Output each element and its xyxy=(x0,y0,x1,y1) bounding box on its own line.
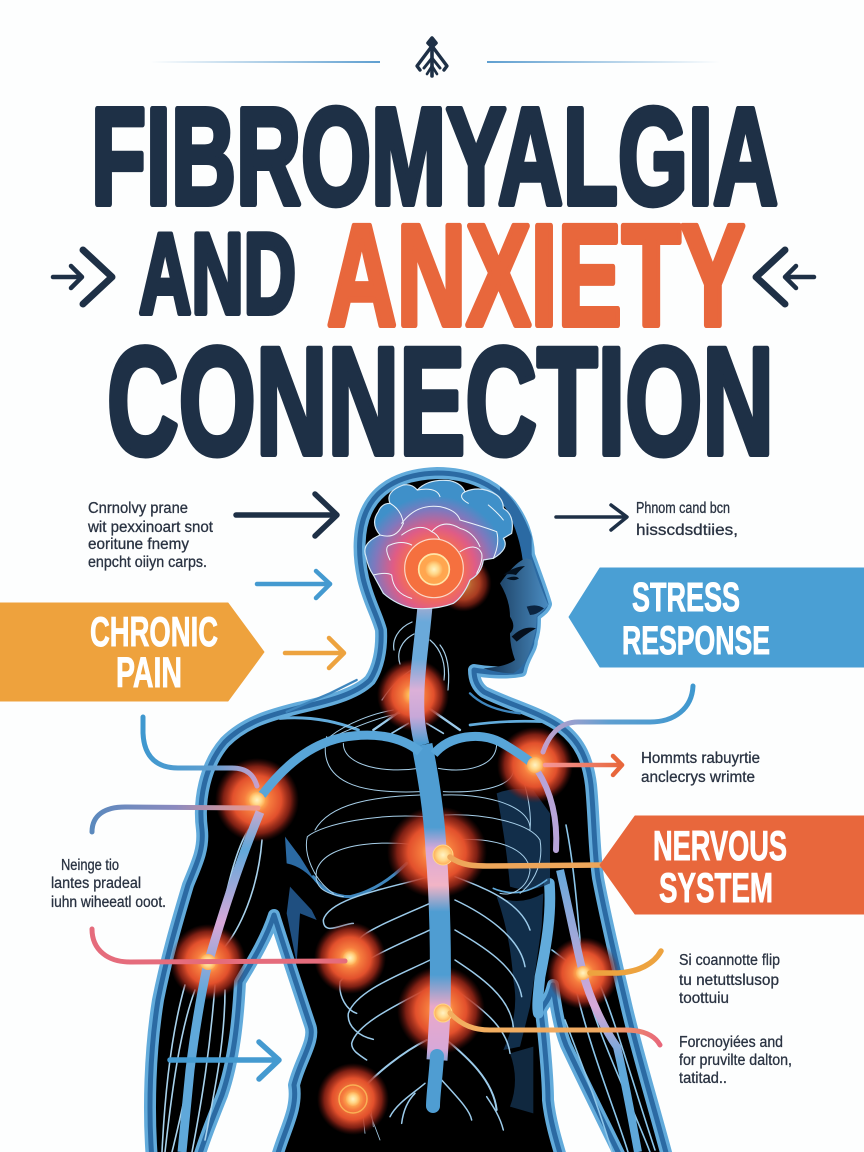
brain folds xyxy=(373,489,503,598)
glow: right shoulder xyxy=(497,727,573,803)
brain core center xyxy=(425,561,443,578)
divider left xyxy=(150,61,380,63)
text block: upper left: wit pexxinoart snot xyxy=(87,519,214,536)
text block: hormones xyxy=(641,750,760,786)
connector: blue right xyxy=(543,686,693,752)
banner text: PAIN: PAIN xyxy=(116,649,182,697)
silhouette inner edge xyxy=(150,473,668,1152)
top ornament xyxy=(150,38,720,76)
brain xyxy=(365,480,512,612)
torso edge on right xyxy=(538,883,550,1013)
glowing pain points xyxy=(170,659,619,1135)
text block: upper left: eoritune fnemy xyxy=(88,536,189,553)
right lower torso shading xyxy=(510,1047,533,1113)
left arm nerve xyxy=(182,812,260,1152)
node: abdomen xyxy=(434,1004,452,1022)
banner text: SYSTEM: SYSTEM xyxy=(659,864,773,911)
icon: left title arrows xyxy=(53,250,112,304)
left chest shapes xyxy=(285,837,317,883)
text block: upper left: Cnrnolvy prane xyxy=(88,500,188,517)
text block: upper left: enpcht oiiyn carps. xyxy=(88,554,207,571)
icon: right title arrows xyxy=(756,250,814,304)
node: left shoulder xyxy=(249,792,265,808)
text block: lower right one: Si coannotte flip xyxy=(679,952,780,969)
arrow: red to hormones text xyxy=(545,756,622,775)
text block: lower right one: toottuiu xyxy=(679,990,729,1007)
node: hip ring xyxy=(339,1085,367,1113)
text block: lower right one xyxy=(679,952,780,1007)
text block: lower right two xyxy=(679,1034,792,1087)
main nerves xyxy=(182,580,638,1152)
thin upper ribs xyxy=(306,710,541,897)
clavicles xyxy=(280,680,543,730)
body silhouette xyxy=(150,473,668,1152)
banner: nervous system xyxy=(600,816,864,914)
banner: chronic pain xyxy=(0,603,264,701)
text block: upper right: Phnom cand bcn xyxy=(636,500,730,517)
glow: chest xyxy=(387,806,487,898)
left lower chest shape xyxy=(287,887,317,963)
fishbone ribs xyxy=(323,707,530,1130)
glow: right elbow xyxy=(547,937,619,1009)
connector: orange right xyxy=(590,951,661,973)
text block: left middle xyxy=(51,857,166,911)
text block: lower right one: tu netuttslusop xyxy=(679,972,779,989)
right chest shading xyxy=(497,789,550,889)
glow: left rib xyxy=(314,922,386,994)
arrow: orange left xyxy=(285,638,344,668)
node: right shoulder xyxy=(527,757,543,773)
right arm nerve xyxy=(560,870,638,1152)
text block: hormones: Hommts rabuyrtie xyxy=(641,750,760,767)
text block: lower right two: tatitad.. xyxy=(679,1070,727,1087)
glowing node centers xyxy=(200,757,590,1106)
brain core inner ring xyxy=(419,554,449,585)
connector: lower right xyxy=(450,1013,660,1045)
chest band right xyxy=(493,880,547,893)
glow: abdomen xyxy=(397,966,485,1054)
text block: upper left xyxy=(87,500,214,571)
node: chest xyxy=(433,845,453,865)
node: hip xyxy=(346,1092,360,1106)
chest band left xyxy=(313,863,407,897)
connector: blue to pink left xyxy=(92,807,258,832)
glow: neck xyxy=(377,659,449,731)
text block: lower right two: Forcnoyiées and xyxy=(679,1034,783,1051)
node: left rib xyxy=(343,951,357,965)
brain core outer ring xyxy=(405,539,463,598)
arrow: dark left xyxy=(236,494,337,536)
left arm details xyxy=(162,830,262,1152)
banner text: RESPONSE: RESPONSE xyxy=(622,619,770,663)
banner text: STRESS: STRESS xyxy=(632,574,740,620)
text block: left middle: iuhn wiheeatl ooot. xyxy=(51,894,166,911)
brain shape xyxy=(365,480,512,609)
right abdomen shading xyxy=(497,893,543,1050)
connector: chest to nervous banner xyxy=(450,857,602,866)
arrow: dark right xyxy=(556,505,627,530)
left shoulder nerve xyxy=(262,735,420,795)
right arm details xyxy=(552,825,655,1152)
icon: nerve tree xyxy=(417,38,447,76)
neck rib lines xyxy=(382,622,449,700)
glow: hip xyxy=(317,1063,389,1135)
text block: left middle: lantes pradeal xyxy=(51,875,141,892)
glow: left elbow xyxy=(170,924,246,1000)
text block: hormones: anclecrys wrimte xyxy=(641,769,755,786)
title word: AND: AND xyxy=(139,211,296,338)
right upper arm lilac xyxy=(537,770,556,850)
connector: pink left xyxy=(92,929,345,962)
text block: upper right xyxy=(636,500,738,539)
glow: left shoulder xyxy=(215,758,299,842)
head rim and face xyxy=(483,487,548,673)
glow behind brain xyxy=(435,555,492,612)
banner: stress response xyxy=(569,568,864,667)
node: left elbow xyxy=(200,954,216,970)
torso detail group xyxy=(280,680,550,1140)
connector: blue top left xyxy=(143,717,257,786)
divider right xyxy=(487,61,720,63)
spinal cord trunk xyxy=(422,745,440,1060)
node: right elbow xyxy=(576,966,590,980)
spinal cord tail xyxy=(433,1056,437,1106)
arrow: blue lower left xyxy=(170,1042,279,1079)
text block: lower right two: for pruvilte dalton, xyxy=(679,1052,792,1069)
right shoulder nerve xyxy=(434,736,535,765)
title xyxy=(91,80,778,487)
connector lines xyxy=(92,686,693,1045)
spinal cord upper xyxy=(417,580,427,745)
human body figure xyxy=(150,473,668,1152)
banner text: CHRONIC: CHRONIC xyxy=(90,608,218,655)
arrow: blue left xyxy=(257,571,330,598)
text block: left middle: Neinge tio xyxy=(61,857,119,874)
text block: upper right: hisscdsdtiies, xyxy=(636,522,738,539)
banner text: NERVOUS: NERVOUS xyxy=(653,822,787,869)
hip nerve ends xyxy=(362,1103,380,1140)
